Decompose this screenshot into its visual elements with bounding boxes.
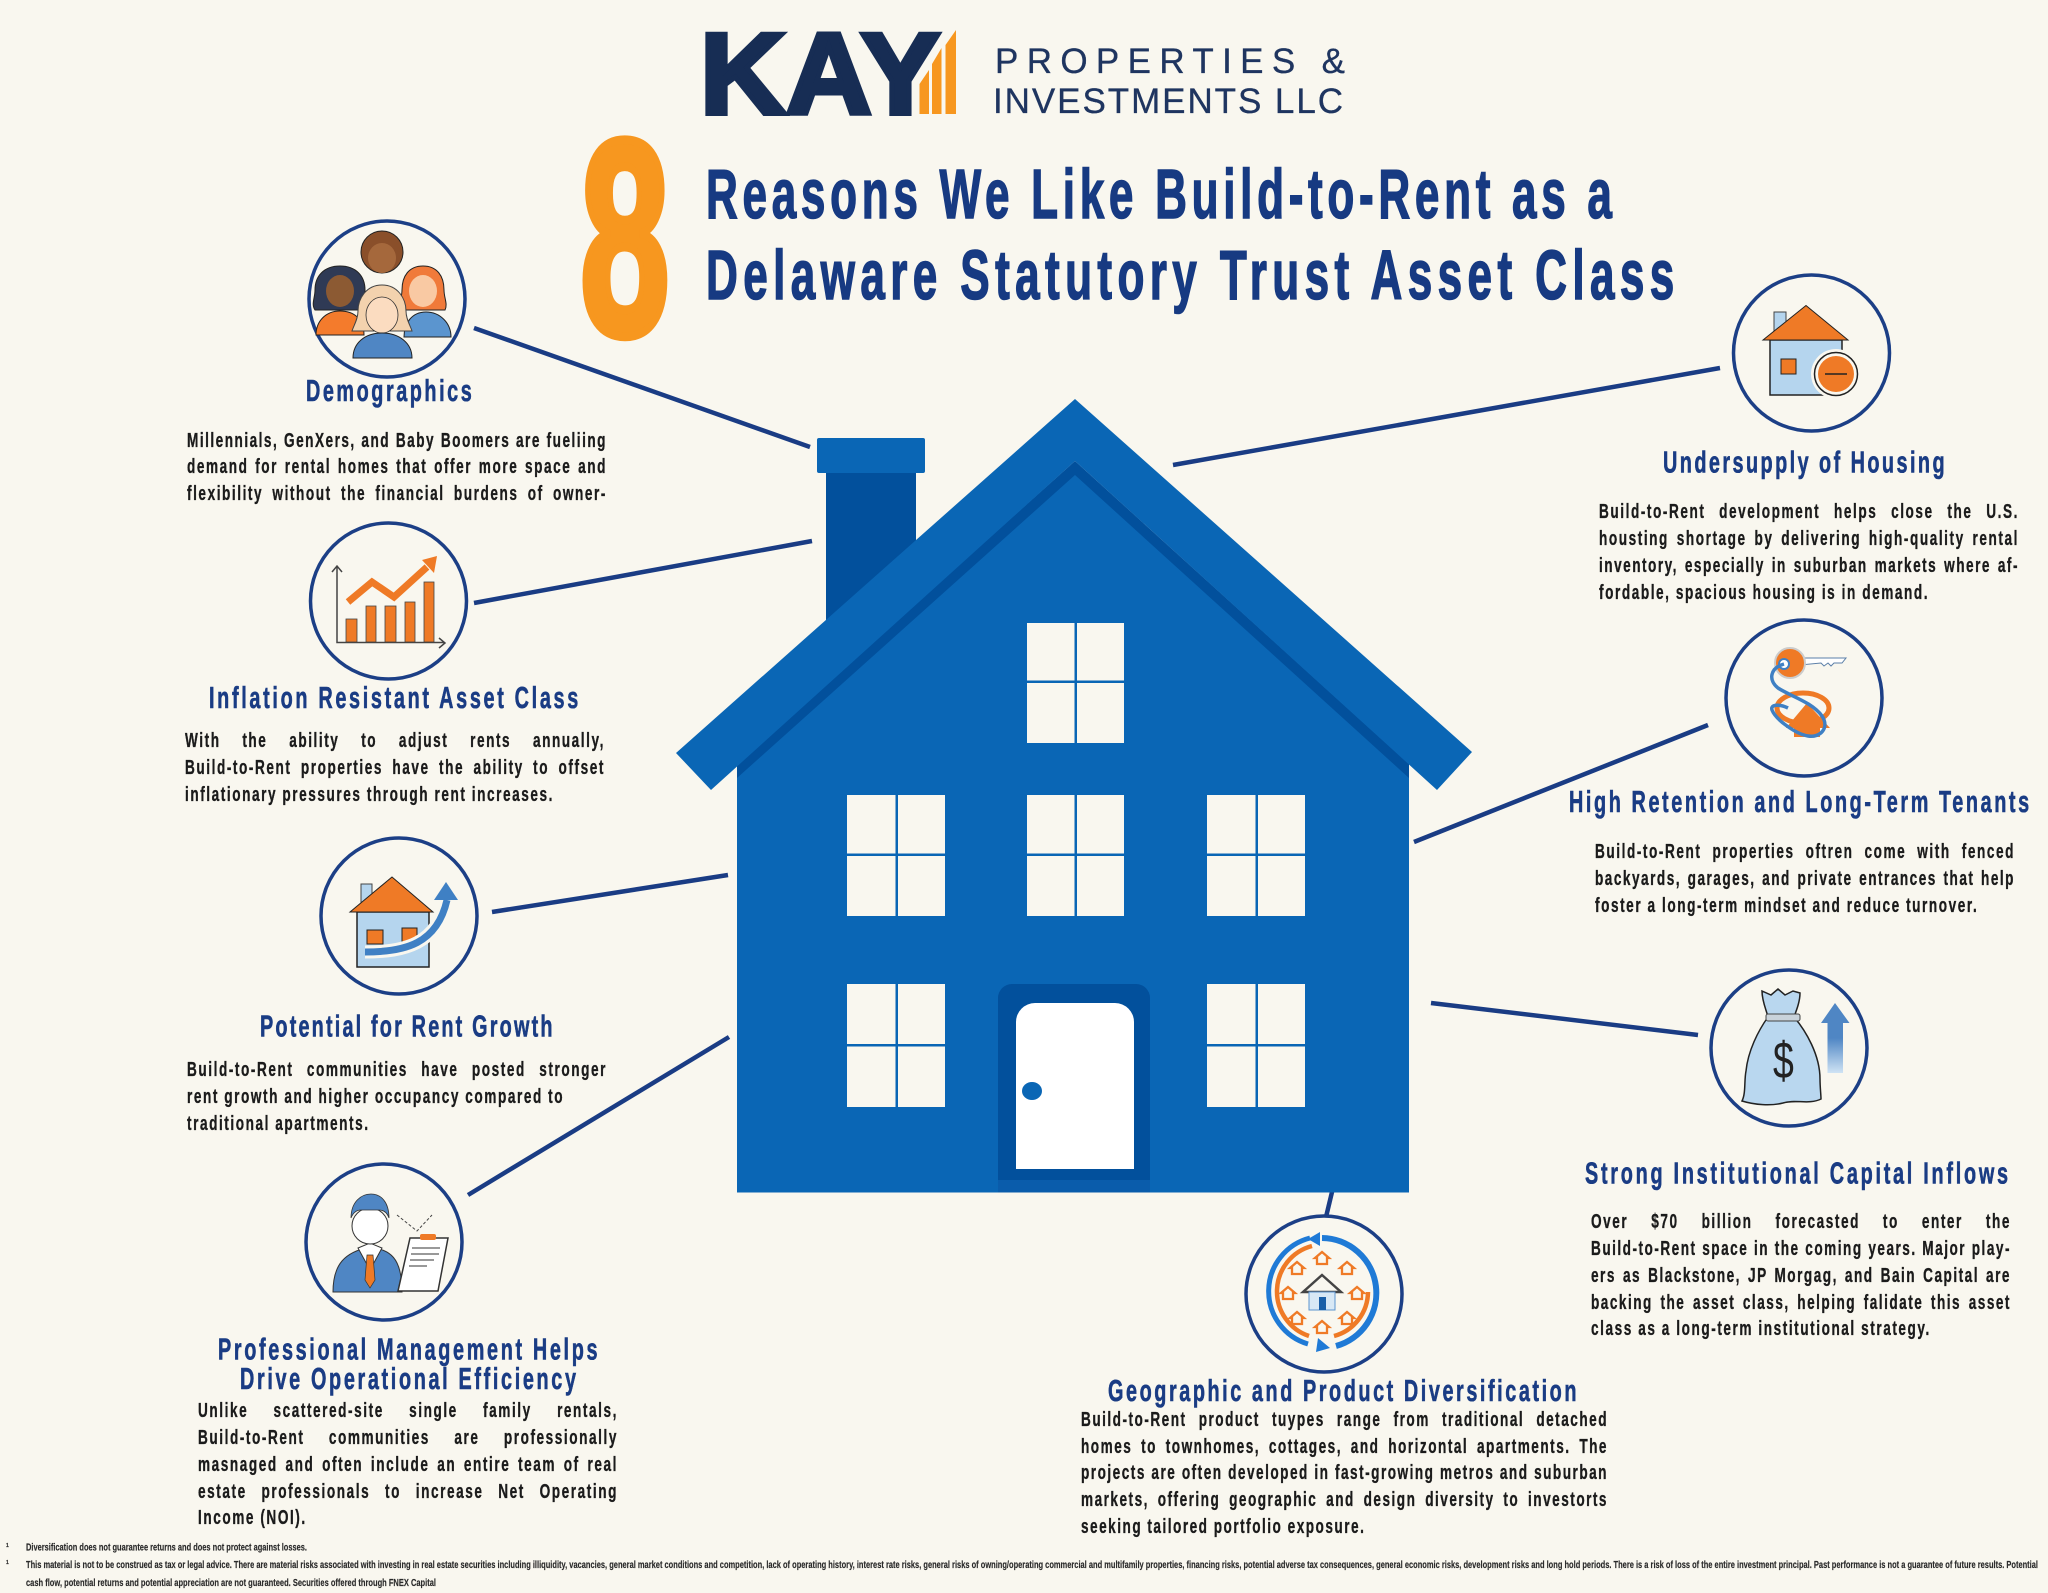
body text: Unlike scattered-site single family rentals, [198, 1400, 618, 1422]
body text: projects are often developed in fast-growing metros and suburban [1081, 1462, 1608, 1484]
panel: high retention and long-term tenants [1569, 618, 2029, 917]
body text [187, 430, 607, 505]
body text: foster a long-term mindset and reduce turnover. [1595, 895, 1978, 917]
body text [1591, 1211, 2011, 1340]
footnote 2 line 2: cash flow, potential returns and potential appreciation are not guaranteed. Securities offered through FNEX Capital [26, 1577, 436, 1589]
logo: Kay Properties & Investments LLC [700, 24, 1345, 120]
heading: Geographic and Product Diversification [1108, 1372, 1576, 1408]
panel: potential for rent growth [187, 836, 607, 1135]
body text: inflationary pressures through rent increases. [185, 784, 554, 806]
body text: ers as Blackstone, JP Morgag, and Bain Capital are [1591, 1265, 2011, 1287]
body text: Build-to-Rent properties oftren come with fenced [1595, 841, 2015, 863]
connector: undersupply [1173, 368, 1720, 465]
body text: homes to townhomes, cottages, and horizontal apartments. The [1081, 1436, 1608, 1458]
heading: Inflation Resistant Asset Class [209, 679, 578, 715]
body text: housting shortage by delivering high-quality rental [1599, 528, 2019, 550]
connector: rent growth [492, 875, 728, 912]
body text: demand for rental homes that offer more space and [187, 456, 607, 478]
body text: inventory, especially in suburban markets where af- [1599, 555, 2019, 577]
icon: money bag with up arrow: $ [1773, 1031, 1794, 1089]
body text: Build-to-Rent properties have the ability to offset [185, 757, 605, 779]
body text [187, 1059, 607, 1135]
heading: High Retention and Long-Term Tenants [1569, 783, 2029, 819]
body text [1599, 501, 2019, 604]
body text: Over $70 billion forecasted to enter the [1591, 1211, 2011, 1233]
logo wordmark line 2: INVESTMENTS LLC [993, 82, 1343, 120]
logo wordmark line 1: PROPERTIES & [995, 42, 1345, 81]
body text: backyards, garages, and private entrances that help [1595, 868, 2015, 890]
connector: inflation [474, 541, 812, 603]
footnote markers [6, 1543, 9, 1566]
body text: markets, offering geographic and design diversity to investorts [1081, 1489, 1608, 1511]
heading line 1: Professional Management Helps [218, 1331, 598, 1367]
body text: Build-to-Rent communities are professionally [198, 1427, 618, 1449]
panel: undersupply of housing [1599, 273, 2019, 604]
heading: Demographics [306, 372, 472, 408]
body text [1081, 1409, 1608, 1538]
panel: demographics [187, 219, 607, 505]
heading: Strong Institutional Capital Inflows [1585, 1155, 2008, 1191]
body text: class as a long-term institutional strategy. [1591, 1318, 1931, 1340]
body text: Millennials, GenXers, and Baby Boomers are fueliing [187, 430, 607, 452]
body text: traditional apartments. [187, 1113, 370, 1135]
body text [198, 1400, 618, 1529]
body text: Income (NOI). [198, 1507, 307, 1529]
body text: Build-to-Rent development helps close the U.S. [1599, 501, 2019, 523]
connector: demographics [474, 328, 810, 447]
connector: professional management [468, 1037, 729, 1195]
body text: rent growth and higher occupancy compared to [187, 1086, 564, 1108]
title line 2: Delaware Statutory Trust Asset Class [706, 237, 1674, 315]
icon: ring of houses [1246, 1216, 1402, 1372]
icon: house with growth arrow [321, 838, 477, 994]
house illustration [676, 399, 1472, 1192]
body text: seeking tailored portfolio exposure. [1081, 1516, 1365, 1538]
footnote 1: Diversification does not guarantee returns and does not protect against losses. [26, 1542, 307, 1554]
body text: fordable, spacious housing is in demand. [1599, 582, 1929, 604]
connector: high retention [1414, 725, 1708, 842]
logo mark: orange bars [920, 30, 956, 114]
body text [184, 730, 605, 806]
icon: house with minus badge [1734, 275, 1890, 431]
panel: professional management [198, 1162, 618, 1529]
body text: estate professionals to increase Net Operating [198, 1481, 618, 1503]
body text: masnaged and often include an entire team of real [198, 1454, 618, 1476]
panel: geographic and product diversification [1081, 1214, 1608, 1538]
heading: Potential for Rent Growth [260, 1008, 552, 1044]
body text: flexibility without the financial burdens of owner- [187, 483, 607, 505]
body text: backing the asset class, helping falidate this asset [1591, 1292, 2011, 1314]
panel: inflation resistant asset class [184, 521, 605, 806]
panel: strong institutional capital inflows [1585, 968, 2011, 1340]
footnotes [6, 1542, 2038, 1589]
heading: Undersupply of Housing [1663, 444, 1945, 480]
body text: With the ability to adjust rents annually, [185, 730, 605, 752]
footnote markers: 1 [6, 1560, 9, 1566]
icon: manager with clipboard [306, 1164, 462, 1320]
title [580, 130, 1674, 345]
connector: institutional capital [1431, 1003, 1698, 1035]
icon: group of people [309, 221, 465, 377]
connector: diversification [1326, 1192, 1332, 1217]
icon: money bag with up arrow [1711, 970, 1867, 1126]
title line 1: Reasons We Like Build-to-Rent as a [706, 156, 1612, 234]
footnote markers: 1 [6, 1543, 9, 1549]
heading line 2: Drive Operational Efficiency [240, 1360, 576, 1396]
body text: Build-to-Rent product tuypes range from traditional detached [1081, 1409, 1608, 1431]
icon: rising bar chart [310, 523, 466, 679]
body text: Build-to-Rent communities have posted stronger [187, 1059, 607, 1081]
icon: key with house keychain [1726, 620, 1882, 776]
body text: Build-to-Rent space in the coming years. Major play- [1591, 1238, 2011, 1260]
body text [1595, 841, 2015, 917]
